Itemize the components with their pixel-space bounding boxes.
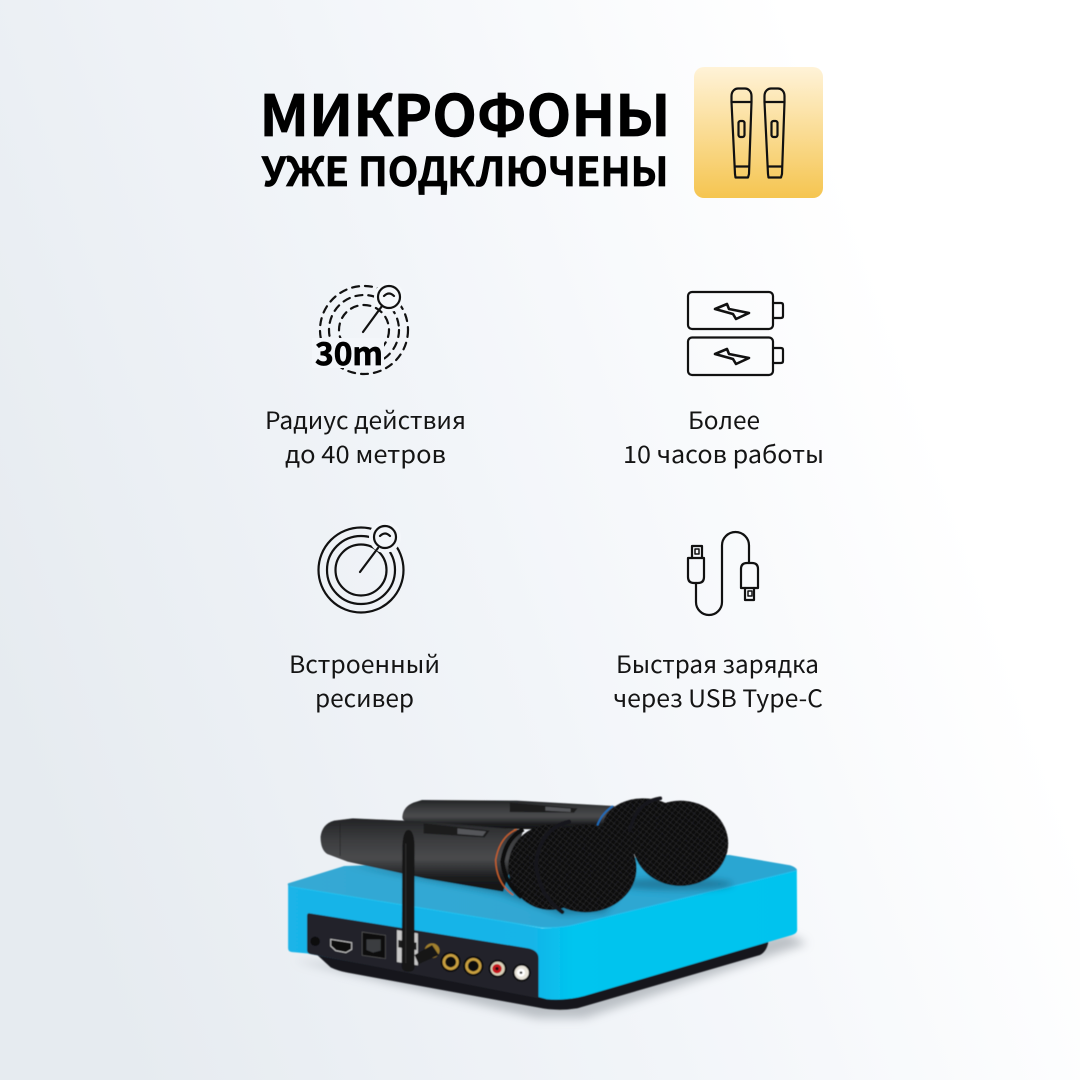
icon: 30m radius — [312, 282, 408, 374]
box top surface — [288, 855, 797, 928]
icon: built-in receiver — [318, 521, 404, 612]
text: radius — [265, 401, 466, 470]
text: battery: 10 часов работы — [623, 435, 824, 470]
title: УЖЕ ПОДКЛЮЧЕНЫ — [262, 140, 668, 198]
text: receiver: ресивер — [315, 679, 414, 714]
rear microphone — [402, 798, 728, 886]
box underside — [315, 942, 768, 1010]
text: battery — [623, 401, 824, 470]
text: charging: Быстрая зарядка — [616, 645, 819, 680]
text: radius: до 40 метров — [285, 435, 446, 470]
icon: USB cable — [688, 532, 758, 615]
title: МИКРОФОНЫ — [260, 71, 670, 153]
text: battery: Более — [688, 401, 760, 436]
text: radius: Радиус действия — [265, 401, 466, 436]
microphone shadows on the box — [348, 865, 733, 915]
top edge highlight — [290, 871, 796, 928]
ports — [310, 930, 531, 982]
box side faces — [288, 869, 797, 1000]
text: receiver — [289, 645, 440, 714]
product photo: receiver box with two microphones — [288, 798, 807, 1018]
icon: 30m radius: 30m — [315, 329, 383, 374]
icon: two microphones on yellow card — [694, 67, 823, 198]
shadow — [294, 933, 807, 1018]
title — [260, 71, 670, 198]
antenna — [402, 830, 415, 972]
connector panel — [307, 913, 539, 998]
text: charging — [613, 645, 823, 714]
text: receiver: Встроенный — [289, 645, 440, 680]
text: charging: через USB Type-C — [613, 679, 823, 714]
icon: two batteries — [688, 292, 783, 375]
front microphone — [321, 818, 637, 912]
